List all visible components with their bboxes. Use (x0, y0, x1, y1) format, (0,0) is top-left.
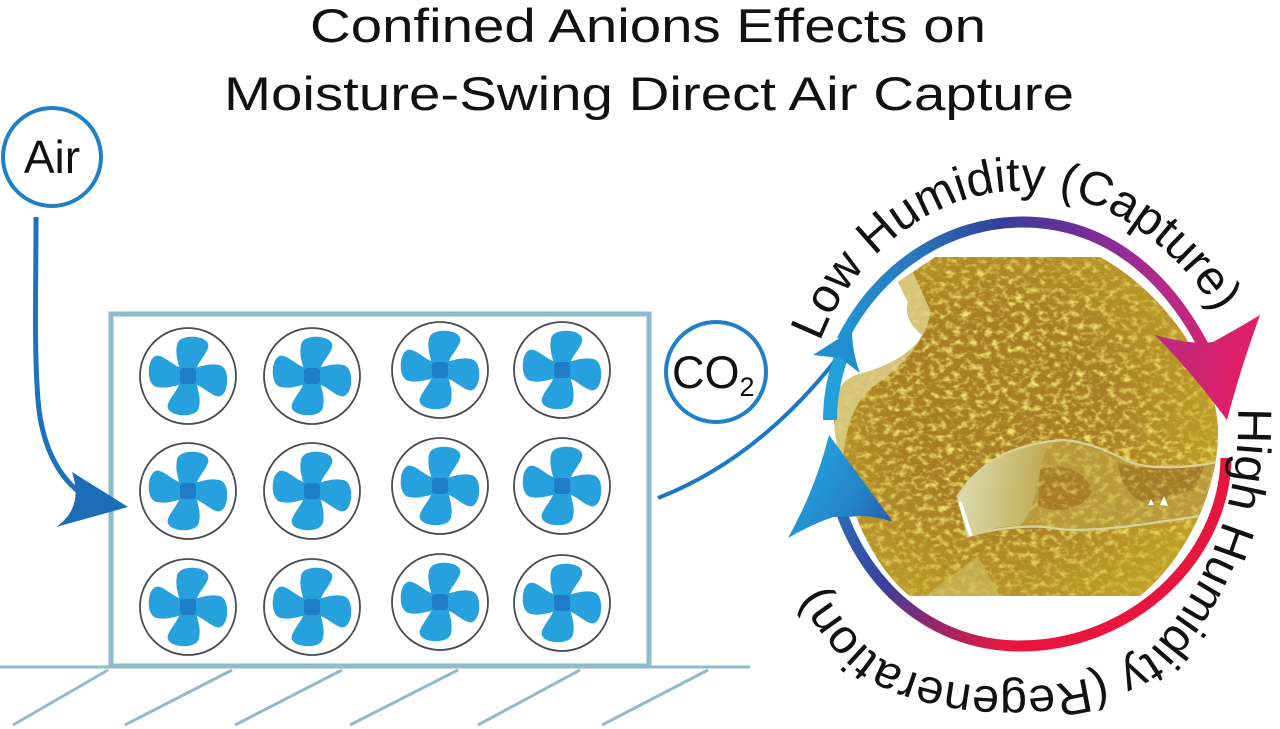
cycle arc: high humidity regeneration (842, 458, 1226, 646)
arrow: air into unit (36, 217, 128, 527)
co2 label: CO (672, 347, 740, 398)
air label (3, 108, 101, 206)
arrow: co2 to sorbent cycle (658, 352, 842, 498)
arrowhead: regeneration end (788, 435, 893, 538)
title: Moisture-Swing Direct Air Capture (224, 67, 1074, 120)
arrowhead: low humidity inflow (813, 330, 860, 373)
co2 label (666, 322, 766, 422)
co2 label: 2 (740, 372, 755, 402)
panel: direct air capture unit (111, 314, 649, 666)
air label: Air (24, 131, 80, 183)
cycle arc: low humidity capture (842, 222, 1216, 372)
arc stub: low humidity inflow (830, 352, 843, 420)
ground with hatching (0, 667, 750, 725)
sorbent micrograph (830, 250, 1225, 600)
curved label: high humidity regeneration: High Humidity (Regeneration) (797, 412, 1272, 715)
fan array (140, 322, 610, 655)
title: Confined Anions Effects on (310, 0, 986, 52)
title (224, 0, 1074, 120)
cream rim (834, 270, 930, 470)
cavity (957, 440, 1218, 537)
arrowhead: capture end (1155, 315, 1260, 420)
curved label: low humidity capture: Low Humidity (Capture) (791, 157, 1240, 338)
